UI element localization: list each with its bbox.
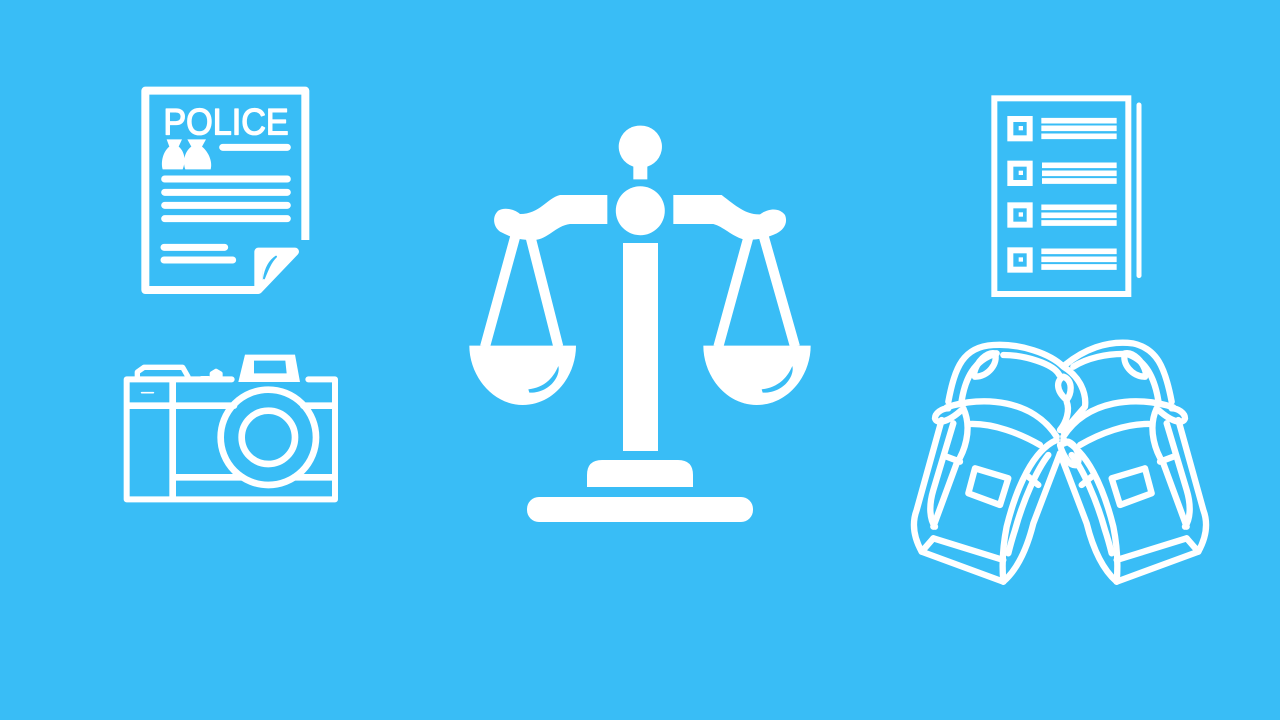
icon: camera [127,355,335,499]
shutter dial [137,367,188,377]
right backpack [1060,343,1206,582]
checklist row 2 [1010,164,1117,183]
left pan highlight [528,366,559,393]
police heading: POLICE [163,100,289,142]
body dividers [129,381,333,498]
page curl shadow [264,257,276,278]
suspects silhouette [162,139,211,169]
camera body [127,379,335,499]
scale pole [623,243,658,451]
checklist row 1 [1010,119,1117,138]
report text lines [164,147,287,260]
right beam [673,195,786,240]
viewfinder [238,355,300,382]
grip mark [142,390,153,395]
left pan strings [485,235,558,347]
icon: police report document [145,91,305,290]
right pan [703,346,811,405]
icon: checklist document [994,98,1139,294]
left backpack [914,345,1085,582]
checklist row 3 [1010,205,1117,225]
document outline [145,91,305,290]
scale top finial [619,126,662,179]
right pan highlight [762,366,793,393]
icon: scales of justice [469,126,811,522]
icon: two backpacks [914,343,1206,582]
checklist row 4 [1010,250,1117,270]
left beam [494,195,607,240]
top button [202,371,221,378]
left pan [469,346,576,405]
back page edge [1131,105,1146,276]
page curl [262,254,294,287]
lens [221,390,316,485]
checklist page [994,98,1128,294]
scale base bar [527,497,753,522]
scale pivot [616,186,665,235]
right pan strings [718,235,795,347]
scale base dome [587,460,693,487]
